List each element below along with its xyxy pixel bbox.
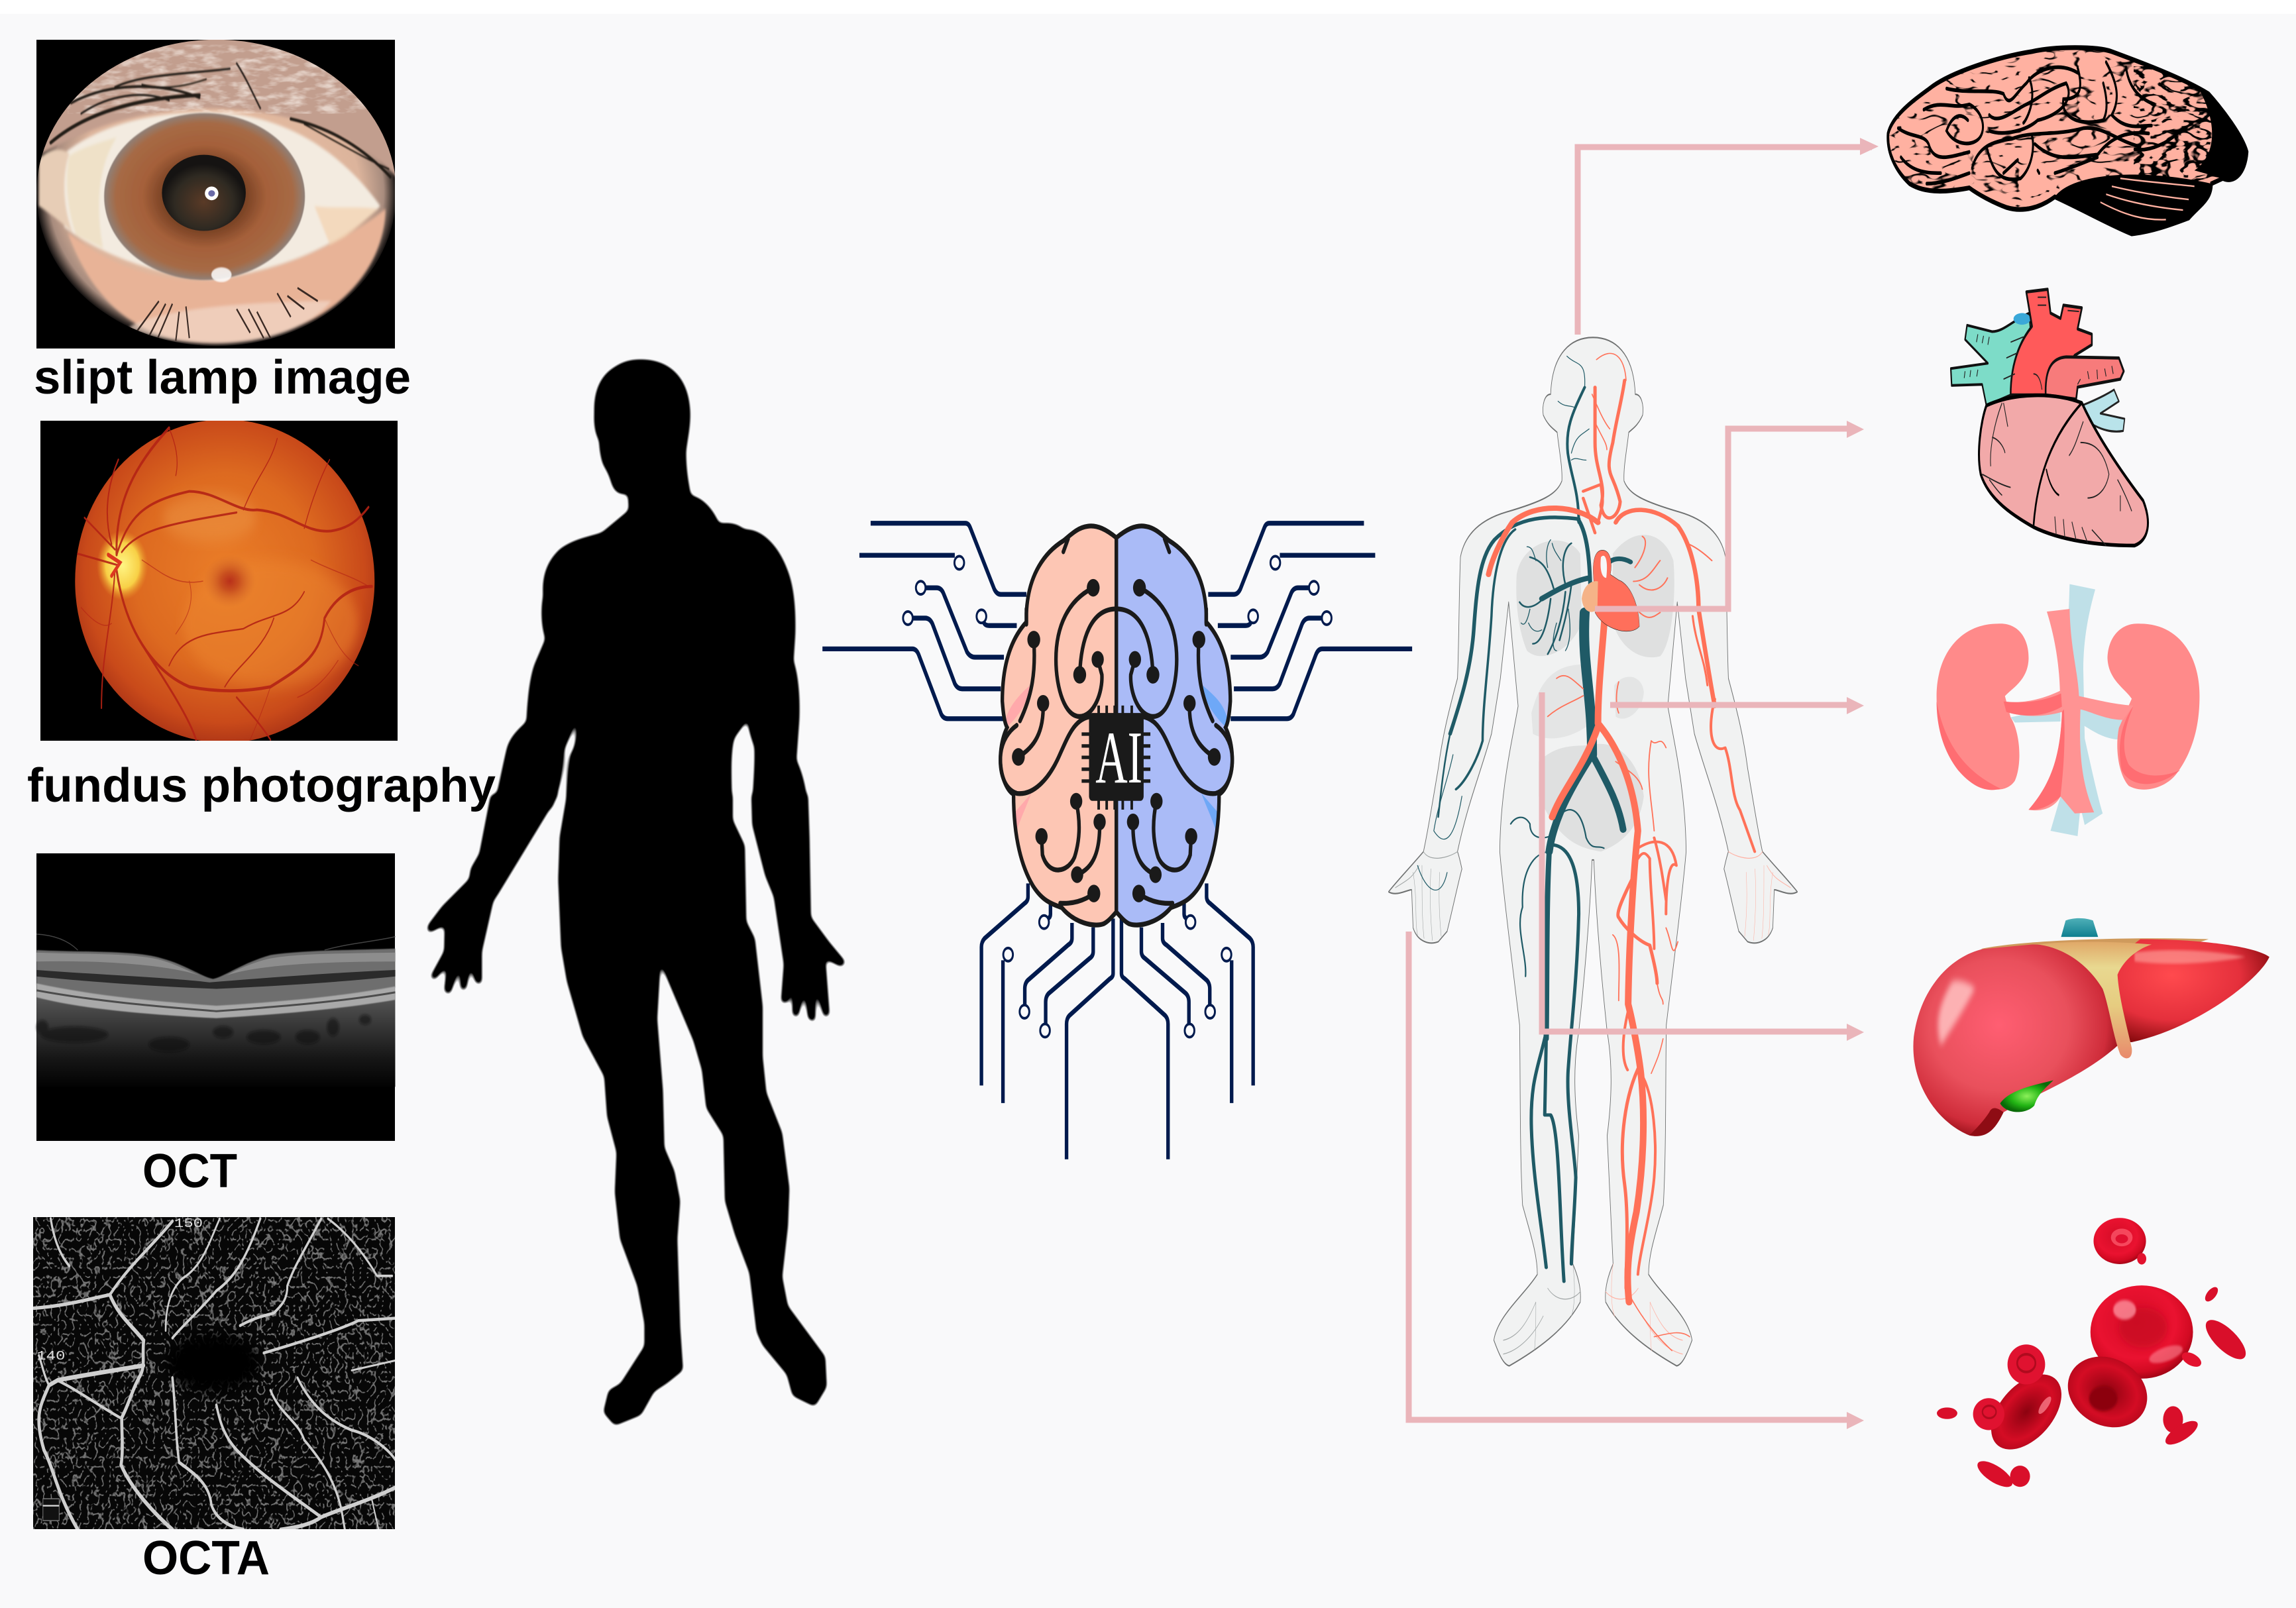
- choroid glow: [36, 992, 395, 1087]
- right lobe: [2112, 939, 2269, 1042]
- vena cava stub: [2061, 918, 2098, 937]
- vena cava: [1951, 313, 2032, 405]
- AI chip: [1081, 706, 1150, 810]
- lower pulmonary veins: [2082, 390, 2124, 431]
- arteries: [1488, 353, 1755, 1351]
- retinal layers: [36, 949, 395, 1007]
- choroid shadows: [36, 1015, 371, 1052]
- cerebellum ridges: [2101, 178, 2195, 220]
- AI brain with circuit traces: [822, 523, 1412, 1159]
- eye surrounding skin: [36, 106, 395, 346]
- label: OCTA: OCTA: [142, 1532, 270, 1585]
- wrinkle texture: [1888, 46, 2246, 239]
- panel: OCTA: 140: [36, 1350, 65, 1364]
- outlines and nodes: [1001, 526, 1232, 925]
- panel: OCT: [36, 853, 395, 1141]
- pupil: [162, 155, 246, 231]
- macula: [209, 561, 250, 602]
- cell: left small: [1973, 1398, 2004, 1430]
- cell: left small top: [2008, 1344, 2045, 1385]
- panel: slit lamp image: [34, 37, 399, 348]
- circuit wires: [822, 523, 1412, 1159]
- left hemisphere: [1001, 526, 1117, 925]
- ureter and vein: [2051, 584, 2103, 836]
- upper lid skin: [34, 37, 399, 180]
- dark shading: [2195, 86, 2247, 180]
- arrow: to blood: [1409, 932, 1864, 1429]
- iris: [104, 113, 305, 280]
- large vessels: [34, 1218, 396, 1530]
- arrow: to liver: [1542, 692, 1864, 1041]
- panel: fundus photography: [40, 419, 398, 743]
- body heart: [1582, 550, 1639, 631]
- left kidney: [1937, 623, 2028, 790]
- coronary lines: [1964, 297, 2132, 545]
- hand and foot lines: [1395, 851, 1790, 1354]
- arrow: to heart: [1595, 421, 1864, 609]
- gyri: [1898, 62, 2177, 184]
- sclera: [64, 112, 380, 279]
- panel: OCTA: [33, 1217, 396, 1530]
- inset icon: [43, 1499, 59, 1521]
- right hemisphere: [1117, 526, 1232, 925]
- organ: kidneys: [1937, 584, 2199, 836]
- organ: heart: [1951, 290, 2148, 545]
- veins: [1417, 356, 1623, 1281]
- eyebrow lashes: [51, 64, 390, 177]
- cell: lower centre: [2065, 1349, 2150, 1435]
- top band: [1981, 938, 2209, 961]
- ventricles: [1979, 396, 2148, 545]
- blood cells: [1937, 1218, 2249, 1492]
- circulatory system body: [1389, 337, 1797, 1366]
- falciform ligament: [2038, 942, 2152, 1058]
- organ: brain: [1888, 46, 2247, 239]
- aorta: [2010, 290, 2092, 395]
- scale numbers: 150: [174, 1217, 203, 1232]
- foveal avascular zone: [166, 1332, 260, 1394]
- cell: top: [2093, 1218, 2146, 1265]
- optic disc: [97, 531, 148, 600]
- human silhouette: [428, 359, 845, 1424]
- left lobe: [1913, 945, 2118, 1136]
- retinal vessels: [78, 428, 372, 739]
- lower lashes: [132, 288, 318, 343]
- arrow: to kidney: [1610, 697, 1864, 714]
- cell: large: [2091, 1285, 2202, 1379]
- label: OCT: OCT: [142, 1145, 237, 1198]
- limbus spot: [211, 267, 231, 282]
- arrow: to brain: [1578, 138, 1879, 335]
- cell: left dark: [1984, 1359, 2069, 1465]
- retina disc: [75, 419, 374, 743]
- organ: liver: [1913, 918, 2269, 1136]
- AI chip: AI: [1095, 717, 1142, 799]
- pulmonary artery: [2046, 357, 2124, 400]
- right kidney: [2108, 623, 2199, 790]
- gallbladder: [2000, 1081, 2053, 1112]
- small fragments: [1937, 1284, 2249, 1492]
- organ shadows: [1516, 535, 1674, 851]
- body outline: [1389, 337, 1797, 1366]
- label: fundus photography: fundus photography: [27, 759, 496, 812]
- lower lid: [68, 209, 386, 343]
- artery: [2004, 609, 2133, 814]
- label: slipt lamp image: slipt lamp image: [34, 351, 411, 404]
